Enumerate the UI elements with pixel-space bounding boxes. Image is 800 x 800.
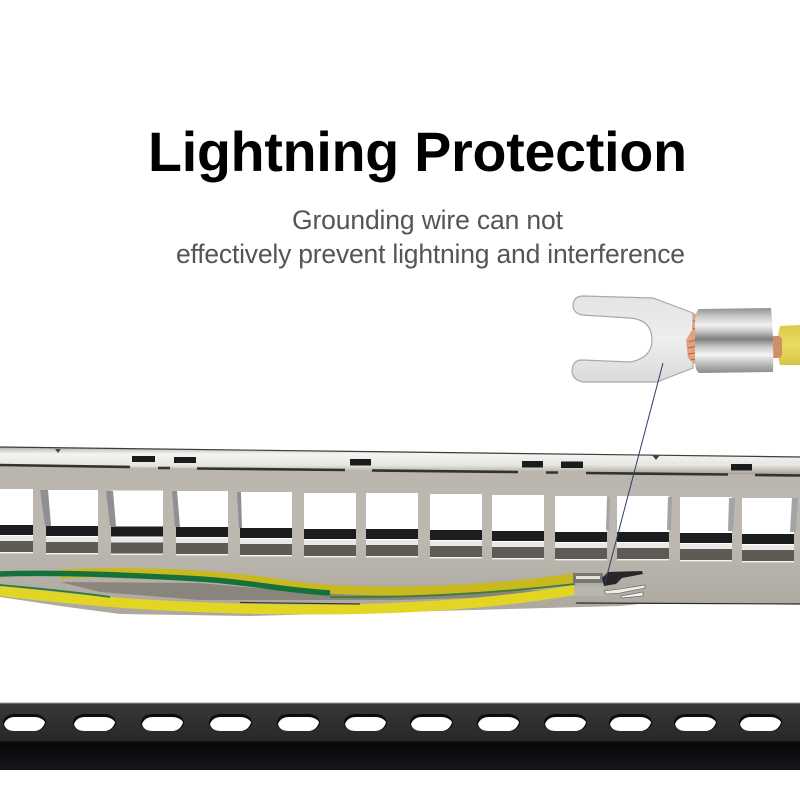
subtitle: effectively prevent lightning and interference [176, 239, 685, 269]
subtitle [176, 205, 685, 269]
ground wires [0, 573, 575, 610]
spade fork [572, 296, 693, 382]
rail slots [3, 714, 782, 731]
crimp barrel [695, 308, 773, 373]
panel face [0, 464, 800, 616]
title: Lightning Protection [148, 121, 687, 183]
black mounting rail [0, 702, 800, 770]
rail body [0, 703, 800, 770]
patch panel [0, 447, 800, 616]
copper strands rear [770, 336, 782, 358]
subtitle: Grounding wire can not [292, 205, 564, 235]
large spade terminal [572, 296, 800, 382]
panel top flange [0, 447, 800, 476]
keystone windows [0, 489, 798, 562]
yellow wire insulation [778, 325, 800, 365]
rear shadow strip [60, 582, 575, 600]
panel bottom edge [576, 603, 800, 604]
copper strands front [686, 313, 703, 364]
pointer line [605, 363, 663, 583]
small ring terminal [573, 571, 645, 598]
